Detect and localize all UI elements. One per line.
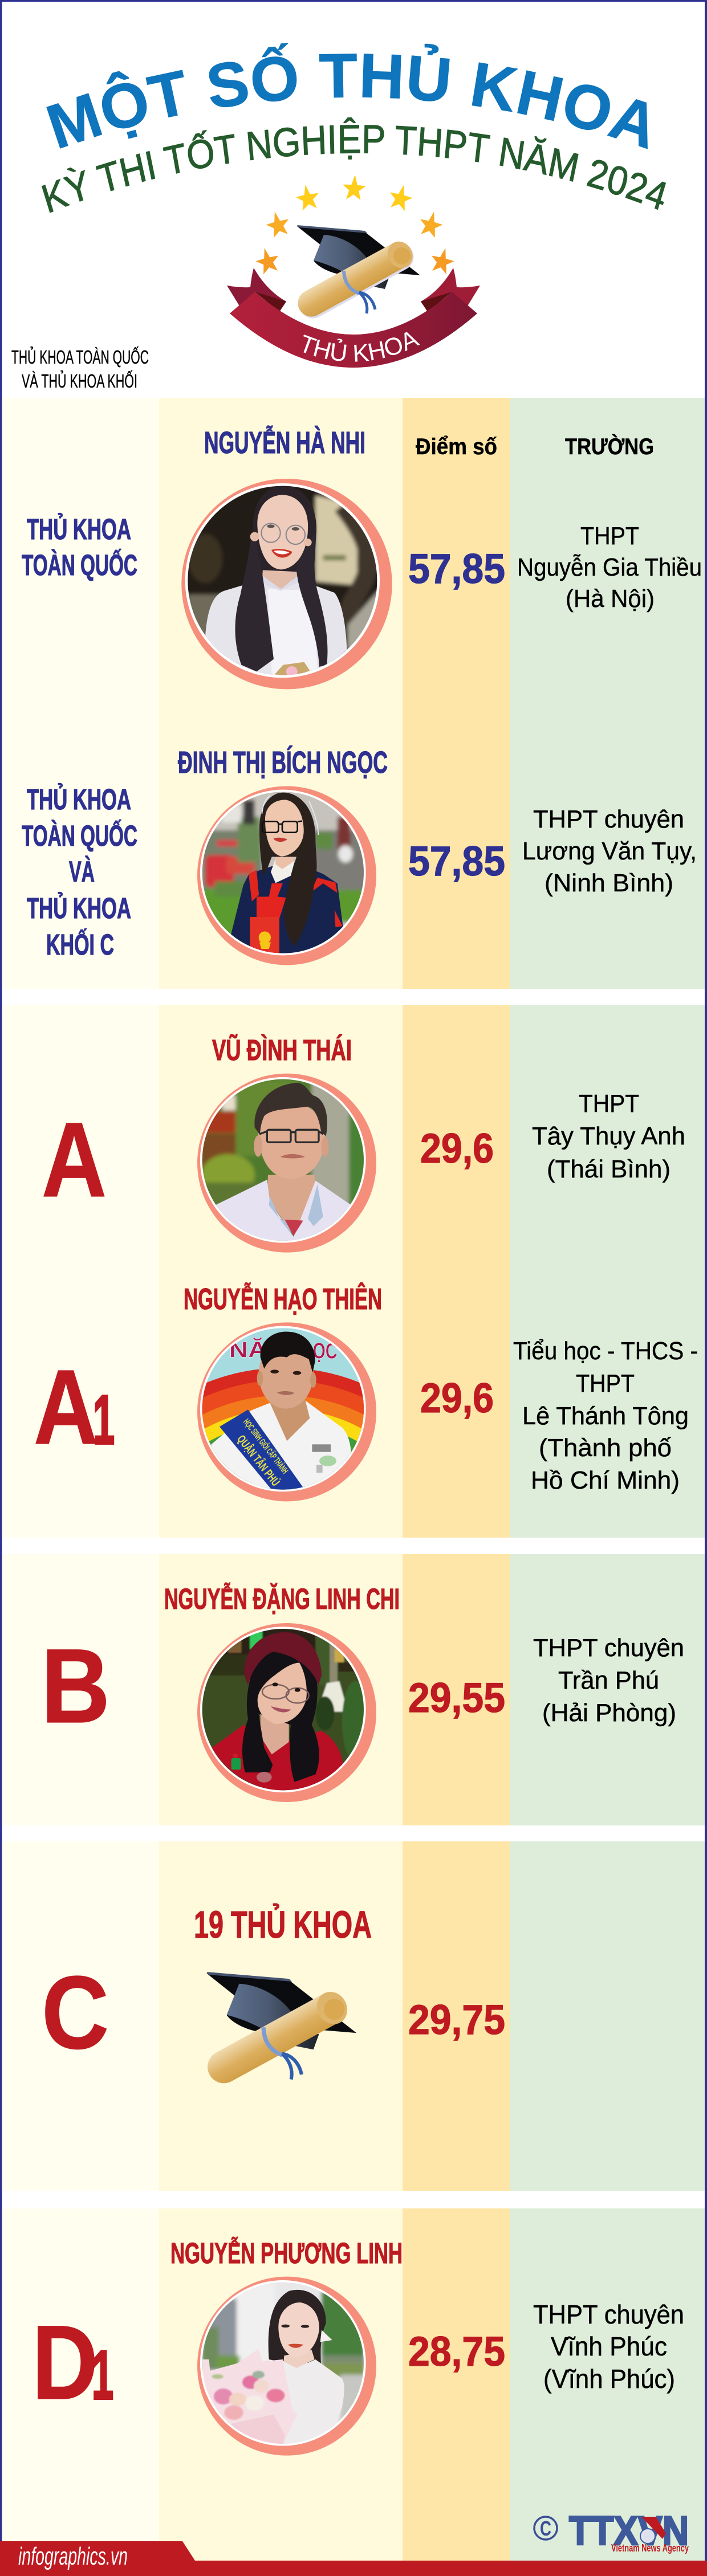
school: Tây Thụy Anh (532, 1090, 685, 1183)
block letter D1: 1 (92, 2336, 113, 2414)
panel: khối D1 (2, 2208, 705, 2561)
icon: ribbon: THỦ KHOA (303, 332, 420, 362)
subtitle: KỲ THI TỐT NGHIỆP THPT NĂM 2024 (41, 117, 666, 213)
school: Tây Thụy Anh: (Thái Bình) (547, 1155, 671, 1183)
portrait: Nguyễn Hạo Thiên (197, 1322, 376, 1501)
school: Lương Văn Tụy (522, 805, 697, 897)
portrait: Đinh Thị Bích Ngọc (194, 781, 382, 969)
portrait: Nguyễn Hạo Thiên: QUẬN TÂN PHÚ (234, 1432, 283, 1489)
school: Nguyễn Gia Thiều: (Hà Nội) (566, 585, 655, 613)
label: thủ khoa toàn quốc và khối C: TOÀN QUỐC (22, 819, 137, 852)
legend text: VÀ THỦ KHOA KHỐI (22, 370, 137, 392)
school: Trần Phú: THPT chuyên (533, 1634, 684, 1662)
score: 29,6: 29,6 (420, 1126, 494, 1172)
school: Lê Thánh Tông (513, 1337, 698, 1494)
school: Tây Thụy Anh: THPT (579, 1090, 639, 1118)
school: Lê Thánh Tông: (Thành phố (539, 1434, 672, 1462)
name: Vũ Đình Thái: VŨ ĐÌNH THÁI (212, 1033, 352, 1066)
school: Lương Văn Tụy: (Ninh Bình) (545, 869, 673, 897)
school: Lê Thánh Tông: Hồ Chí Minh) (531, 1466, 680, 1494)
label: thủ khoa toàn quốc và khối C (22, 782, 137, 961)
name: Đinh Thị Bích Ngọc: ĐINH THỊ BÍCH NGỌC (178, 745, 388, 780)
legend text: THỦ KHOA TOÀN QUỐC (11, 346, 149, 368)
name: Nguyễn Hà Nhi: NGUYỄN HÀ NHI (204, 425, 365, 460)
column header: school: TRƯỜNG (565, 433, 654, 459)
block letter C: C (42, 1954, 109, 2070)
school: Trần Phú: (Hải Phòng) (542, 1699, 676, 1727)
label: thủ khoa toàn quốc (22, 512, 137, 581)
school: Tây Thụy Anh: Tây Thụy Anh (532, 1122, 685, 1150)
school: Vĩnh Phúc: Vĩnh Phúc (551, 2332, 667, 2361)
icon: graduation cap and diploma (297, 225, 420, 313)
school: Lê Thánh Tông: Lê Thánh Tông (522, 1402, 689, 1430)
score: 29,55: 29,55 (408, 1675, 505, 1721)
label: thủ khoa toàn quốc và khối C: KHỐI C (46, 928, 114, 961)
panel: khối C (2, 1841, 705, 2191)
score: 29,75: 29,75 (408, 1997, 505, 2043)
name: Nguyễn Phương Linh: NGUYỄN PHƯƠNG LINH (170, 2236, 403, 2269)
label: thủ khoa toàn quốc: TOÀN QUỐC (22, 548, 137, 581)
block letter A: A (42, 1101, 107, 1219)
icon: graduation cap and diploma (206, 1972, 356, 2080)
score: 29,6: 29,6 (420, 1375, 494, 1421)
legend text (11, 346, 149, 392)
school: Vĩnh Phúc (533, 2300, 684, 2394)
school: Lương Văn Tụy: Lương Văn Tụy, (522, 837, 697, 865)
portrait: Nguyễn Hà Nhi (181, 479, 392, 690)
score: 57,85: 57,85 (408, 546, 505, 592)
block letter A1: 1 (93, 1381, 115, 1458)
portrait: Nguyễn Hạo Thiên: ỌC (312, 1338, 338, 1363)
logo: TTXVN: C (540, 2517, 551, 2540)
column header: score: Điểm số (416, 434, 497, 459)
school: Nguyễn Gia Thiều (517, 522, 702, 613)
school: Trần Phú: Trần Phú (558, 1666, 659, 1694)
portrait: Nguyễn Hạo Thiên: NĂ (229, 1338, 267, 1363)
block letter B: B (41, 1628, 110, 1745)
label: thủ khoa toàn quốc và khối C: THỦ KHOA (27, 891, 131, 924)
portrait: Vũ Đình Thái (194, 1069, 382, 1257)
name: Nguyễn Đặng Linh Chi: NGUYỄN ĐẶNG LINH CHI (164, 1582, 400, 1615)
score: 57,85: 57,85 (408, 838, 505, 885)
title: MỘT SỐ THỦ KHOA (46, 43, 648, 149)
school: Trần Phú (533, 1634, 684, 1727)
footer bar (0, 2541, 707, 2576)
school: Vĩnh Phúc: (Vĩnh Phúc) (543, 2364, 675, 2394)
block letter A1: A (34, 1348, 98, 1466)
icon: ribbon (227, 268, 480, 368)
score: 28,75: 28,75 (408, 2329, 505, 2375)
school: Lương Văn Tụy: THPT chuyên (533, 805, 684, 833)
portrait: Nguyễn Phương Linh (194, 2274, 382, 2462)
panel: khối A và A1 (2, 1005, 705, 1538)
label: thủ khoa toàn quốc và khối C: VÀ (69, 855, 95, 888)
school: Vĩnh Phúc: THPT chuyên (533, 2300, 684, 2329)
label: thủ khoa toàn quốc và khối C: THỦ KHOA (27, 782, 131, 816)
portrait: Nguyễn Đặng Linh Chi (194, 1619, 382, 1807)
panel: thủ khoa toàn quốc (2, 398, 705, 989)
icon: stars (253, 174, 457, 275)
name: Nguyễn Hạo Thiên: NGUYỄN HẠO THIÊN (184, 1282, 382, 1316)
school: Lê Thánh Tông: THPT (576, 1369, 635, 1397)
heading: 19 thủ khoa: 19 THỦ KHOA (194, 1904, 372, 1946)
portrait: Nguyễn Hạo Thiên: HỌC SINH GIỎI CẤP THÀNH (241, 1417, 291, 1476)
label: thủ khoa toàn quốc: THỦ KHOA (27, 512, 131, 545)
logo: TTXVN: TTXVN (569, 2509, 689, 2554)
school: Nguyễn Gia Thiều: THPT (580, 522, 639, 550)
panel: khối B (2, 1554, 705, 1825)
footer site name: infographics.vn (18, 2542, 128, 2570)
block letter D1: D (32, 2304, 98, 2422)
